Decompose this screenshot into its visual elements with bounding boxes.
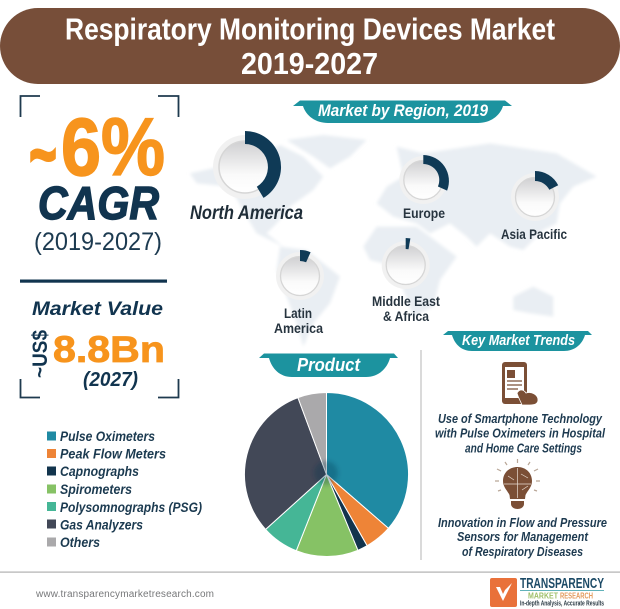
legend: product segments: Others (60, 535, 100, 550)
logo: Transparency Market Research (490, 575, 604, 608)
donut: North America: North America (190, 203, 303, 224)
panel: CAGR and market value: 8.8Bn (53, 329, 165, 370)
panel: CAGR and market value: (2027) (83, 369, 138, 391)
donut: Latin America: Latin (284, 305, 312, 321)
donut: Latin America (274, 250, 324, 336)
legend: product segments (47, 429, 202, 550)
panel: CAGR and market value: Market Value (32, 299, 163, 320)
world map background (190, 135, 597, 347)
panel: CAGR and market value (20, 96, 178, 398)
legend: product segments: Capnographs (60, 464, 139, 479)
pie chart: product share (244, 392, 409, 557)
title banner: 2019-2027 (241, 46, 378, 81)
logo: Transparency Market Research: MARKET (528, 590, 559, 600)
icon: smartphone with hand (502, 362, 538, 405)
legend: product segments: Pulse Oximeters (60, 429, 155, 444)
legend: product segments: Polysomnographs (PSG) (60, 500, 202, 515)
text: smartphone trend (435, 412, 605, 456)
donut: Middle East and Africa: & Africa (383, 308, 429, 324)
donut: Europe (399, 155, 449, 221)
legend: product segments: Spirometers (60, 482, 132, 497)
legend: product segments: Gas Analyzers (60, 518, 143, 532)
title banner (0, 8, 620, 84)
banner: key market trends: Key Market Trends (462, 332, 575, 349)
panel: CAGR and market value: 6% (61, 102, 165, 193)
donut: Asia Pacific (501, 171, 567, 242)
legend: product segments: Peak Flow Meters (60, 446, 166, 462)
icon: light bulb with brain (495, 459, 540, 509)
text: sensors trend: of Respiratory Diseases (462, 545, 583, 559)
logo: Transparency Market Research: RESEARCH (560, 590, 593, 600)
panel: CAGR and market value: (2019-2027) (34, 228, 162, 256)
website address: www.transparencymarketresearch.com (35, 589, 214, 600)
banner: market by region (293, 100, 512, 123)
donut: Middle East and Africa: Middle East (372, 293, 440, 309)
donut: Latin America: America (274, 320, 323, 336)
banner: market by region: Market by Region, 2019 (318, 102, 489, 120)
panel: CAGR and market value: ~US$ (29, 330, 52, 378)
donut: North America (190, 131, 303, 224)
panel: CAGR and market value: ~ (30, 121, 56, 188)
donut: Middle East and Africa (372, 238, 440, 324)
donut: Europe: Europe (403, 205, 445, 221)
donut: Asia Pacific: Asia Pacific (501, 226, 567, 242)
text: sensors trend (438, 516, 607, 559)
banner: product: Product (297, 354, 361, 375)
text: sensors trend: Sensors for Management (457, 530, 589, 544)
panel: CAGR and market value: CAGR (38, 177, 159, 229)
text: smartphone trend: and Home Care Settings (465, 442, 582, 456)
banner: product (259, 354, 398, 377)
